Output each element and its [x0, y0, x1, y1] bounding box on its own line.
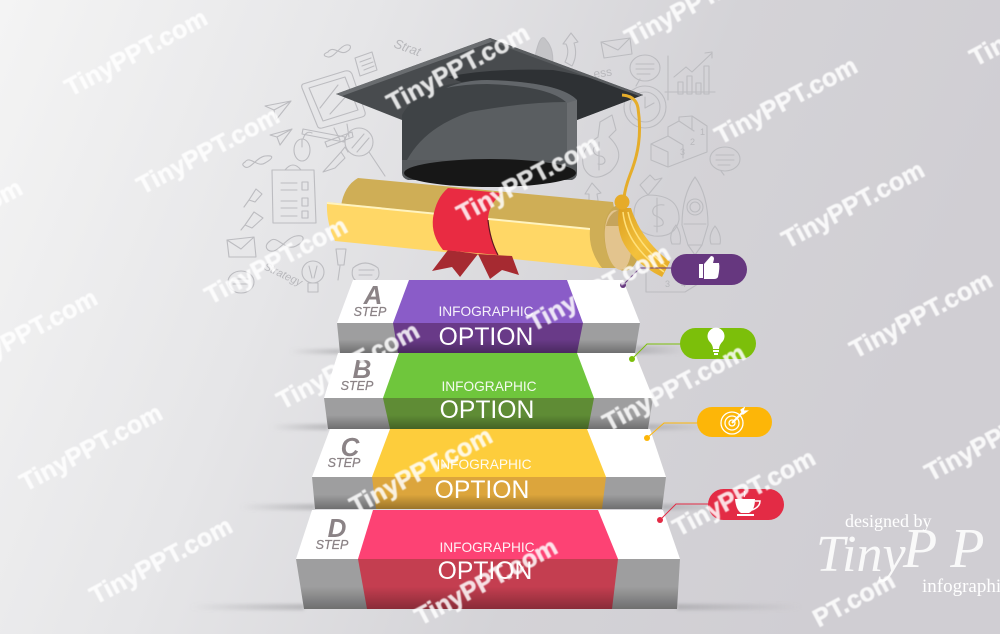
doodle: money bags: [583, 115, 679, 236]
watermarks: TinyPPT.com: [85, 512, 237, 610]
scroll back sheet: [341, 178, 625, 268]
step C yellow side: [372, 477, 606, 509]
icon: light bulb: [707, 328, 724, 355]
watermarks: TinyPPT.com: [710, 52, 862, 150]
watermarks: TinyPPT.com: [132, 102, 284, 200]
step B green side: [383, 398, 594, 429]
mortarboard shadow: [447, 70, 643, 120]
step C white top: [312, 429, 666, 477]
step D label: D: [328, 513, 347, 543]
diploma scroll: [327, 178, 643, 279]
cord: [622, 95, 640, 198]
doodle: strategy text: Strat: [392, 36, 424, 60]
step B text: INFOGRAPHIC: [441, 379, 537, 394]
step B text: [440, 379, 537, 424]
doodle: strategy text: [262, 36, 613, 290]
side shadows of the steps: [190, 346, 802, 610]
doodle: right bubble: [710, 147, 740, 175]
tassel: [614, 95, 670, 277]
doodle: stairs: 1: [700, 127, 705, 137]
watermarks: PT.com: [808, 567, 900, 633]
watermarks: TinyPPT.com: [60, 4, 212, 102]
doodle: bar chart: [665, 52, 715, 100]
doodle: lower stairs: 4: [681, 279, 686, 289]
doodle: pins, envelope, infinity, bulb: [227, 189, 379, 293]
doodle: stairs: 3: [680, 147, 685, 157]
step A: [337, 280, 640, 353]
watermarks: TinyPPT.com: [410, 533, 562, 631]
icon: coffee cup: [735, 491, 760, 516]
callout: yellow target: [644, 407, 772, 441]
step A purple side: [393, 323, 583, 353]
step C label: STEP: [328, 456, 361, 470]
ribbon tails: [432, 250, 519, 279]
knot: [614, 194, 630, 210]
doodle: rocket: [671, 177, 720, 255]
step D pink side: [358, 559, 618, 609]
step B: [324, 353, 653, 429]
step C label: [328, 432, 361, 470]
doodle: top right rocket, arrow, envelope: [534, 33, 660, 86]
step A purple top: [393, 280, 583, 323]
doodle: small arrow: [585, 183, 601, 209]
step A text: INFOGRAPHIC: [438, 304, 534, 319]
watermarks: TinyPPT.com: [523, 239, 675, 337]
cap body: [402, 80, 577, 173]
doodle sketches behind the cap: [227, 33, 740, 293]
scroll end roll: [601, 203, 643, 273]
step D: [296, 510, 680, 609]
red ribbon band: [433, 188, 502, 255]
step C: [312, 429, 666, 509]
watermarks: TinyPPT.com: [272, 317, 424, 415]
watermarks: TinyPPT.com: [845, 266, 997, 364]
step D text: OPTION: [438, 558, 532, 585]
step C text: INFOGRAPHIC: [436, 457, 532, 472]
step B text: OPTION: [440, 397, 534, 424]
icon: thumbs up: [699, 256, 719, 279]
step B label: [341, 354, 374, 393]
step A grey side: [337, 323, 640, 353]
step D grey side: [296, 559, 680, 609]
step C label: C: [341, 432, 361, 462]
watermarks: TinyPPT.com: [345, 422, 497, 520]
step D pink top: [358, 510, 618, 559]
watermarks: TinyPPT.com: [382, 19, 534, 117]
doodle: monitor: [302, 71, 365, 147]
watermarks: TinyPPT.com: [668, 444, 820, 542]
doodle: lower stairs: 3: [665, 279, 670, 289]
step A text: OPTION: [439, 324, 533, 351]
brand signature: designed by: [845, 511, 931, 531]
step D label: STEP: [316, 538, 349, 552]
watermarks: TinyPPT.com: [15, 399, 167, 497]
brand signature: Tiny: [816, 526, 906, 583]
step B green top: [383, 353, 594, 398]
icon: target: [721, 408, 747, 434]
step A label: A: [363, 280, 382, 310]
step D white top: [296, 510, 680, 559]
tassel threads: [618, 208, 670, 277]
doodle: lower stairs: [646, 262, 698, 292]
callout: red cup: [657, 489, 784, 523]
step C text: OPTION: [435, 477, 529, 504]
doodle: clock: [624, 86, 666, 128]
step C grey side: [312, 477, 666, 509]
brand signature: [816, 511, 1000, 597]
doodle: strategy text: ess: [592, 65, 613, 81]
cap opening: [404, 159, 576, 187]
watermarks: TinyPPT.com: [598, 339, 750, 437]
step A label: [354, 280, 387, 319]
graduation cap: [336, 38, 643, 187]
brand signature: PP: [902, 518, 997, 580]
step D label: [316, 513, 349, 552]
scroll front sheet: [327, 202, 602, 268]
watermarks: TinyPPT.com: [777, 156, 929, 254]
doodle: left small icons: [243, 45, 385, 176]
step C yellow top: [372, 429, 606, 477]
step A label: STEP: [354, 305, 387, 319]
mortarboard: [336, 38, 643, 120]
doodle: stairs: [651, 116, 707, 167]
step A white top: [337, 280, 640, 323]
step B white top: [324, 353, 653, 398]
step B label: B: [353, 354, 371, 384]
step D text: [438, 540, 535, 585]
watermarks: TinyPPT.com: [200, 212, 352, 310]
step C text: [435, 457, 532, 504]
callout: green bulb: [629, 328, 756, 362]
callout: purple thumbs up: [620, 254, 747, 288]
step B grey side: [324, 398, 653, 429]
doodle: strategy text: Strategy: [262, 261, 305, 290]
step B label: STEP: [341, 379, 374, 393]
step A text: [438, 304, 534, 351]
doodle: clipboard: [272, 165, 316, 223]
doodle: stairs: 2: [690, 137, 695, 147]
step D text: INFOGRAPHIC: [439, 540, 535, 555]
watermarks: TinyPPT.com: [452, 130, 604, 228]
